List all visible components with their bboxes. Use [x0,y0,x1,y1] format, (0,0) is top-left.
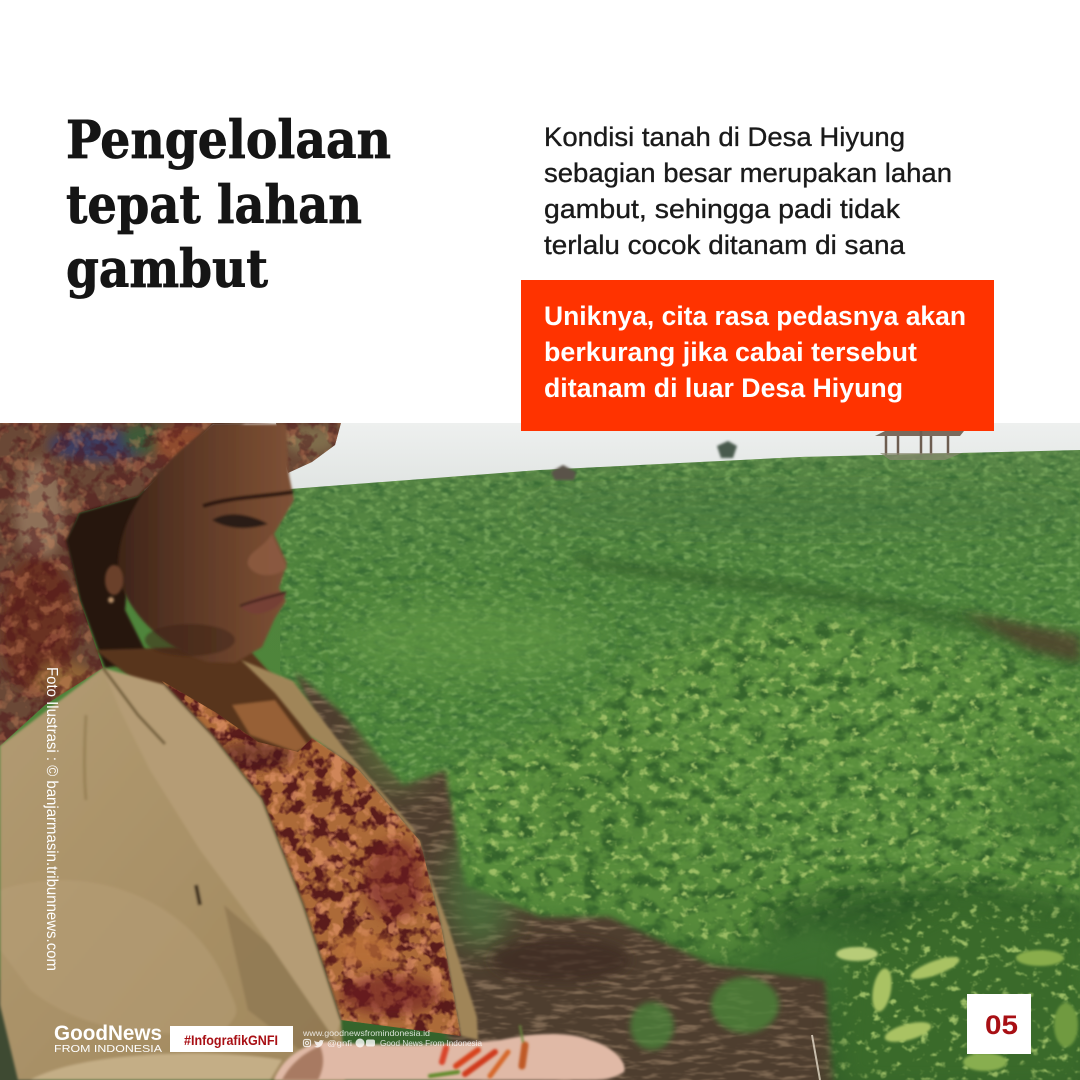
pepper field background [0,445,1080,1080]
icon: instagram [304,1040,310,1046]
social media links: www.goodnewsfromindonesia.id [302,1028,430,1038]
hashtag label [170,1026,293,1052]
small plants at the bottom of the furrow [630,977,779,1050]
photo: woman with chillies in a pepper field [0,423,1080,1080]
page number: 05 [985,1010,1018,1040]
woman's jacket [0,660,478,1080]
description text: gambut, sehingga padi tidak [544,194,901,224]
footer logo: GoodNews From Indonesia: FROM INDONESIA [54,1043,162,1055]
red chillies in the palm [430,1026,525,1076]
icon: facebook [356,1038,364,1048]
distant hut [551,465,576,480]
distant tree [717,441,737,458]
title: tepat lahan [66,175,362,236]
furrow: dark band between field rows [574,555,1080,672]
footer logo: GoodNews From Indonesia [54,1022,162,1055]
footer logo: GoodNews From Indonesia: GoodNews [54,1022,162,1045]
description text: terlalu cocok ditanam di sana [544,230,906,260]
face [105,424,294,663]
description text: sebagian besar merupakan lahan [544,158,952,188]
open hand [274,1034,625,1080]
hashtag label: #InfografikGNFI [184,1032,278,1048]
callout: orange highlight box: ditanam di luar Desa Hiyung [544,373,903,403]
title [66,110,391,300]
icon: youtube [366,1040,375,1046]
photo credit: Foto Ilustrasi : © banjarmasin.tribunnews.com [43,667,60,971]
blouse with batik pattern [160,680,480,1040]
description text: Kondisi tanah di Desa Hiyung [544,122,905,152]
title: Pengelolaan [66,110,391,171]
social media links: @gnfi [327,1038,352,1048]
hair and neck shadow [66,424,245,668]
near pepper plants [444,594,1080,965]
soil and straw [290,660,860,1080]
title: gambut [66,239,268,300]
description text [544,122,952,260]
field shelter [875,431,964,460]
page number [967,994,1031,1054]
bright leafy plant lower right [820,890,1080,1080]
shadowed ground at bottom-left corner [0,980,19,1080]
sky [245,423,1080,489]
neck and chest skin [96,646,314,752]
callout: orange highlight box [521,280,994,431]
social media links [302,1028,482,1048]
icon: twitter [314,1040,324,1048]
callout: orange highlight box: berkurang jika cabai tersebut [544,337,917,367]
social media links: Good News From Indonesia [380,1038,482,1048]
headscarf [0,423,341,753]
callout: orange highlight box: Uniknya, cita rasa pedasnya akan [544,301,966,331]
